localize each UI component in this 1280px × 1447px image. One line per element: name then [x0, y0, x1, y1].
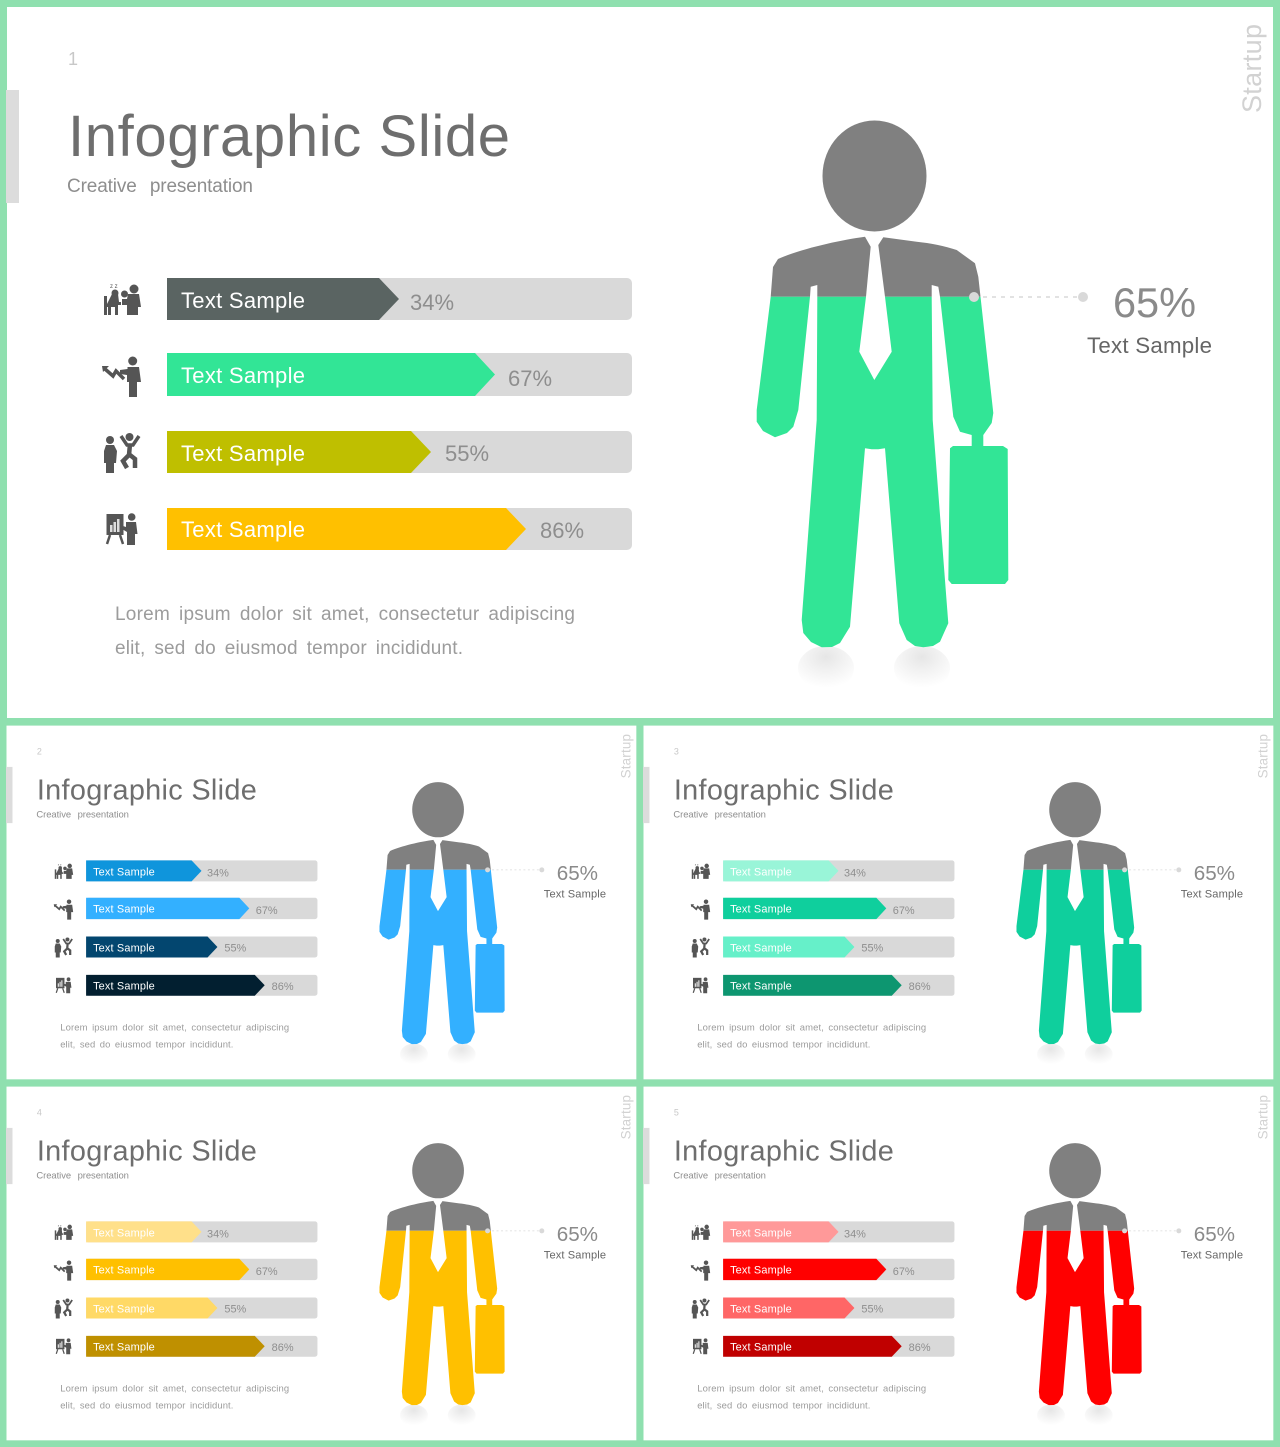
bar row 86%: 86% [909, 1342, 931, 1354]
bar row 34%: 34% [410, 290, 454, 315]
bar row 55%: Text Sample [93, 1303, 155, 1315]
icon: presentation board [693, 1338, 708, 1354]
icon: presentation board [693, 977, 708, 993]
text block: Lorem ipsum dolor sit amet, consectetur adipiscing [697, 1384, 926, 1395]
slide number: 3 [674, 746, 679, 756]
bar row 34%: Text Sample [730, 1227, 792, 1239]
slide number: 5 [674, 1107, 679, 1117]
callout value: 65% [557, 1223, 598, 1246]
bar row 55% [86, 1298, 317, 1318]
icon: people cheering [55, 1299, 72, 1318]
bar row 34%: 34% [844, 1228, 866, 1240]
callout label: Text Sample [1087, 333, 1212, 358]
text block [697, 1384, 926, 1411]
side label: Startup [1255, 1095, 1270, 1139]
subtitle: Creative presentation [36, 1171, 129, 1182]
bar row 67%: Text Sample [93, 1265, 155, 1277]
bar row 67%: 67% [256, 905, 278, 917]
icon: meeting [692, 862, 710, 879]
bar row 86%: Text Sample [93, 980, 155, 992]
bar row 67% [723, 898, 954, 919]
icon: meeting [55, 862, 73, 879]
text block: elit, sed do eiusmod tempor incididunt. [697, 1400, 870, 1411]
text block: Lorem ipsum dolor sit amet, consectetur adipiscing [60, 1384, 289, 1395]
bar row 86%: 86% [909, 981, 931, 993]
bar row 67%: 67% [893, 905, 915, 917]
bar row 34%: 34% [844, 867, 866, 879]
text block: Lorem ipsum dolor sit amet, consectetur adipiscing [115, 604, 575, 625]
subtitle: Creative presentation [673, 810, 766, 821]
icon: meeting [692, 1223, 710, 1240]
figure: businessman [757, 120, 1008, 690]
panel: slide 2 blue [6, 726, 636, 1079]
bar row 67%: Text Sample [730, 1265, 792, 1277]
subtitle: Creative presentation [673, 1171, 766, 1182]
figure: businessman [1016, 1143, 1142, 1426]
bar row 55% [167, 431, 632, 473]
callout line [1122, 867, 1181, 872]
title: Infographic Slide [68, 104, 510, 169]
bar row 86%: Text Sample [730, 980, 792, 992]
slide number: 1 [68, 49, 78, 69]
bar row 34%: Text Sample [730, 866, 792, 878]
bar row 86%: 86% [540, 518, 584, 543]
panel: slide 4 amber [6, 1087, 636, 1440]
callout line [969, 292, 1088, 302]
bar row 55%: 55% [224, 1303, 247, 1315]
bar row 34%: Text Sample [93, 1227, 155, 1239]
callout value: 65% [1194, 1223, 1235, 1246]
bar row 86% [723, 1336, 954, 1357]
subtitle: Creative presentation [67, 176, 253, 197]
title: Infographic Slide [674, 1136, 894, 1168]
panel: slide 1 [6, 7, 1273, 718]
icon: meeting [104, 284, 141, 315]
text block [60, 1384, 289, 1411]
text block: elit, sed do eiusmod tempor incididunt. [60, 1039, 233, 1050]
icon: presentation board [106, 513, 138, 545]
icon: presenter with arrow [691, 899, 710, 920]
slide number: 2 [37, 746, 42, 756]
bar row 55%: Text Sample [93, 942, 155, 954]
title: Infographic Slide [37, 1136, 257, 1168]
bar row 86%: 86% [272, 981, 294, 993]
bar row 86%: Text Sample [730, 1341, 792, 1353]
bar row 67% [167, 353, 632, 396]
bar row 55%: Text Sample [730, 942, 792, 954]
bar row 55%: 55% [861, 1303, 884, 1315]
bar row 55%: 55% [861, 942, 884, 954]
bar row 67%: Text Sample [181, 363, 305, 388]
icon: presentation board [56, 1338, 71, 1354]
bar row 67%: 67% [893, 1266, 915, 1278]
bar row 67%: Text Sample [93, 904, 155, 916]
callout label: Text Sample [1181, 1250, 1243, 1262]
title: Infographic Slide [37, 775, 257, 807]
icon: presenter with arrow [54, 1260, 73, 1281]
bar row 86%: Text Sample [181, 517, 305, 542]
bar row 86% [723, 975, 954, 996]
bar row 86%: Text Sample [93, 1341, 155, 1353]
text block: elit, sed do eiusmod tempor incididunt. [697, 1039, 870, 1050]
bar row 67% [86, 1259, 317, 1280]
title: Infographic Slide [674, 775, 894, 807]
bar row 34% [723, 1221, 954, 1242]
icon: people cheering [692, 938, 709, 957]
slide number: 4 [37, 1107, 42, 1117]
bar row 55%: 55% [445, 441, 489, 466]
figure: businessman [1016, 782, 1142, 1065]
bar row 34% [86, 860, 317, 881]
text block [60, 1023, 289, 1050]
callout label: Text Sample [544, 1250, 606, 1262]
text block [115, 604, 575, 659]
callout line [485, 867, 544, 872]
bar row 34%: Text Sample [93, 866, 155, 878]
bar row 55%: Text Sample [181, 441, 305, 466]
callout value: 65% [1194, 862, 1235, 885]
bar row 55% [86, 937, 317, 957]
bar row 67% [86, 898, 317, 919]
side label: Startup [618, 734, 633, 778]
bar row 34%: 34% [207, 867, 229, 879]
icon: presenter with arrow [102, 356, 141, 397]
bar row 55% [723, 937, 954, 957]
bar row 34%: Text Sample [181, 288, 305, 313]
panel: slide 3 teal [643, 726, 1273, 1079]
bar row 34%: 34% [207, 1228, 229, 1240]
bar row 55%: 55% [224, 942, 247, 954]
callout line [1122, 1228, 1181, 1233]
icon: presentation board [56, 977, 71, 993]
bar row 86% [86, 975, 317, 996]
bar row 86%: 86% [272, 1342, 294, 1354]
icon: presenter with arrow [54, 899, 73, 920]
icon: people cheering [104, 433, 139, 473]
figure: businessman [379, 782, 505, 1065]
side label: Startup [618, 1095, 633, 1139]
bar row 67%: 67% [256, 1266, 278, 1278]
callout value: 65% [1113, 279, 1196, 326]
bar row 34% [86, 1221, 317, 1242]
text block: Lorem ipsum dolor sit amet, consectetur adipiscing [60, 1023, 289, 1034]
bar row 34% [167, 278, 632, 320]
bar row 34% [723, 860, 954, 881]
bar row 67%: Text Sample [730, 904, 792, 916]
bar row 55%: Text Sample [730, 1303, 792, 1315]
icon: people cheering [692, 1299, 709, 1318]
subtitle: Creative presentation [36, 810, 129, 821]
side label: Startup [1255, 734, 1270, 778]
callout label: Text Sample [1181, 889, 1243, 901]
bar row 55% [723, 1298, 954, 1318]
text block [697, 1023, 926, 1050]
bar row 67% [723, 1259, 954, 1280]
bar row 67%: 67% [508, 366, 552, 391]
icon: presenter with arrow [691, 1260, 710, 1281]
side label: Startup [1237, 24, 1267, 113]
text block: elit, sed do eiusmod tempor incididunt. [60, 1400, 233, 1411]
text block: elit, sed do eiusmod tempor incididunt. [115, 638, 463, 659]
bar row 86% [167, 508, 632, 550]
bar row 86% [86, 1336, 317, 1357]
callout value: 65% [557, 862, 598, 885]
callout label: Text Sample [544, 889, 606, 901]
figure: businessman [379, 1143, 505, 1426]
icon: people cheering [55, 938, 72, 957]
panel: slide 5 red [643, 1087, 1273, 1440]
callout line [485, 1228, 544, 1233]
icon: meeting [55, 1223, 73, 1240]
text block: Lorem ipsum dolor sit amet, consectetur adipiscing [697, 1023, 926, 1034]
